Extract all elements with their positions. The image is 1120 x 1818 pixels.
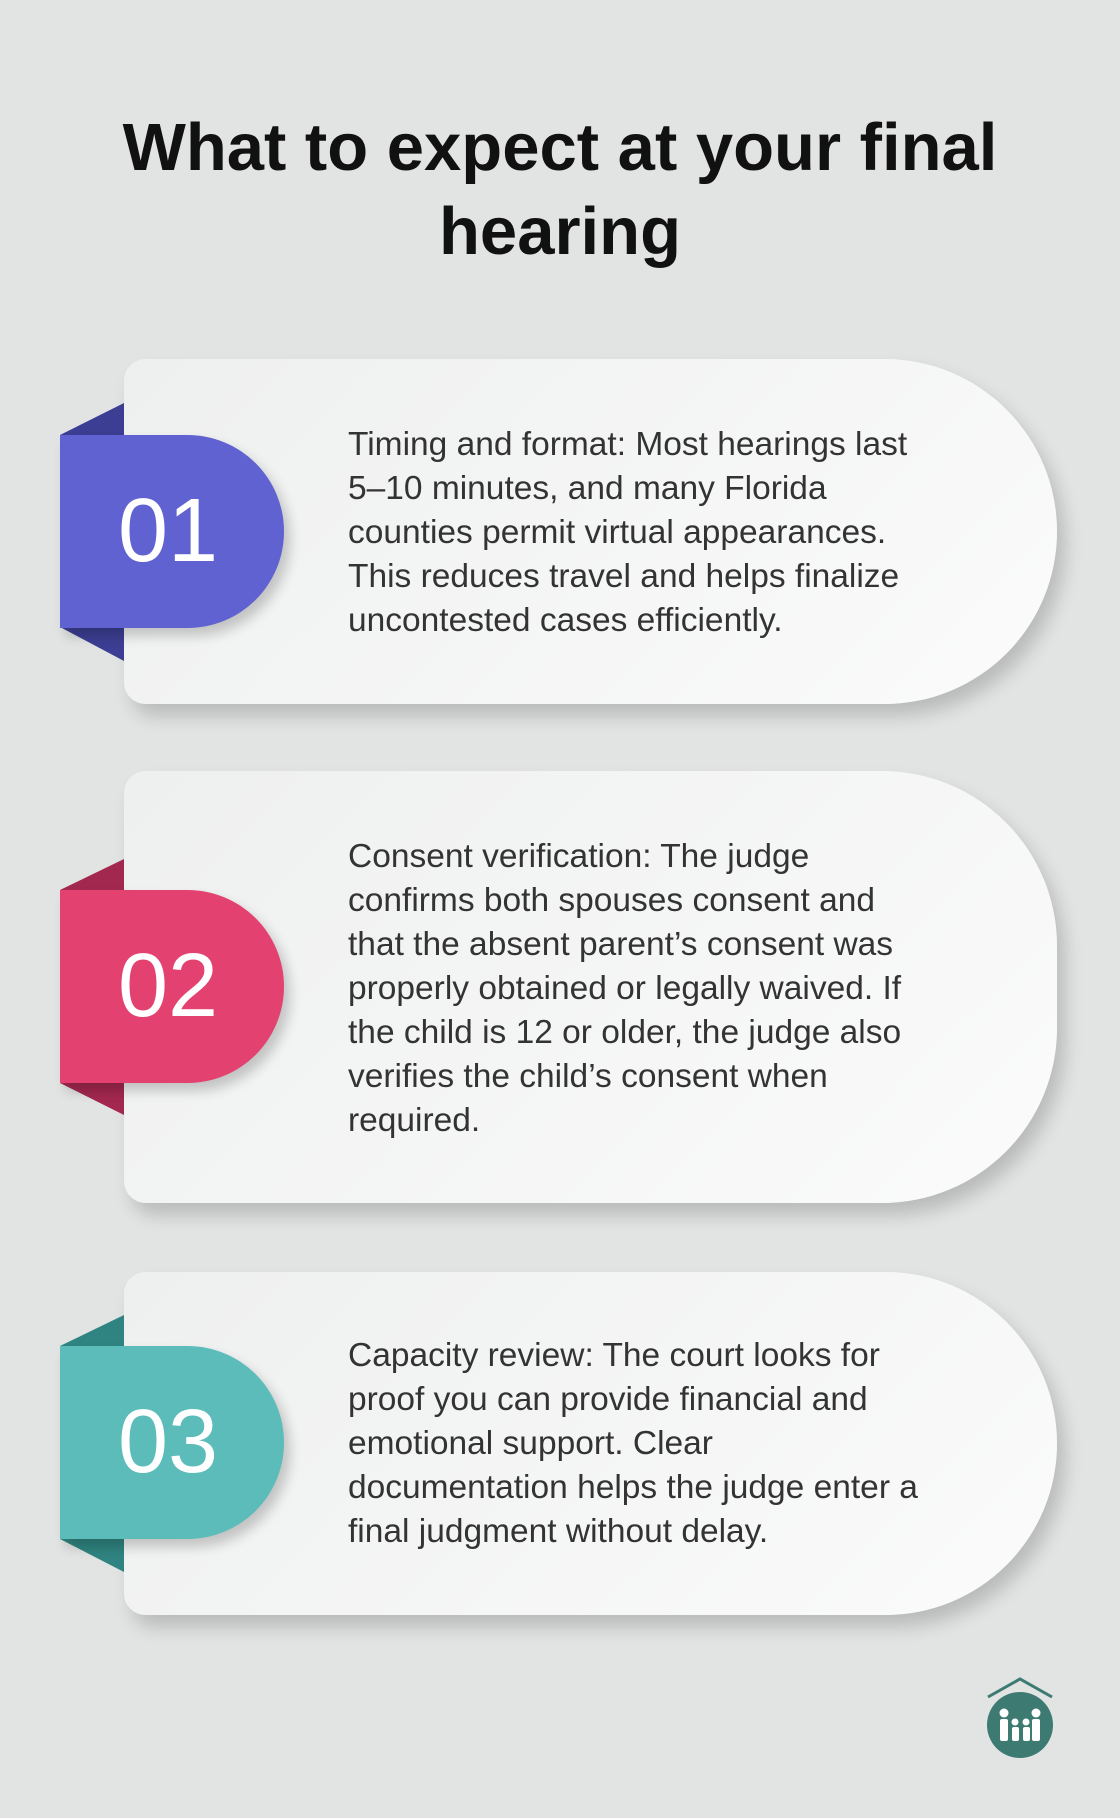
text block 2: confirms both spouses consent and [348,882,875,919]
text block 3 [348,1337,918,1550]
title: What to expect at your final [123,110,997,185]
icon: logo [987,1677,1053,1758]
text block 1: counties permit virtual appearances. [348,514,886,551]
panel: card 1 [124,359,1057,704]
text block 3: documentation helps the judge enter a [348,1469,918,1506]
badge 01: 01 [118,481,218,581]
text block 2 [348,838,902,1139]
text block 2: verifies the child’s consent when [348,1058,828,1095]
icon: fold 2 [60,859,124,1115]
title [122,110,997,269]
text block 3: emotional support. Clear [348,1425,713,1462]
badge 02 [60,890,284,1083]
text block 3: Capacity review: The court looks for [348,1337,880,1374]
badge 02: 02 [118,936,218,1036]
text block 3: final judgment without delay. [348,1513,768,1550]
text block 2: properly obtained or legally waived. If [348,970,901,1007]
text block 2: required. [348,1102,480,1139]
text block 2: Consent verification: The judge [348,838,809,875]
icon: fold 3 [60,1315,124,1572]
text block 1: This reduces travel and helps finalize [348,558,899,595]
badge 01 [60,435,284,628]
icon: fold 1 [60,403,124,661]
text block 1: uncontested cases efficiently. [348,602,783,639]
panel: card 3 [124,1272,1057,1615]
text block 3: proof you can provide financial and [348,1381,868,1418]
badge 03: 03 [118,1392,218,1492]
text block 2: the child is 12 or older, the judge also [348,1014,901,1051]
text block 1: Timing and format: Most hearings last [348,426,907,463]
text block 2: that the absent parent’s consent was [348,926,893,963]
badge 03 [60,1346,284,1539]
panel: card 2 [124,771,1057,1203]
text block 1: 5–10 minutes, and many Florida [348,470,827,507]
title: hearing [439,194,681,269]
text block 1 [348,426,907,639]
